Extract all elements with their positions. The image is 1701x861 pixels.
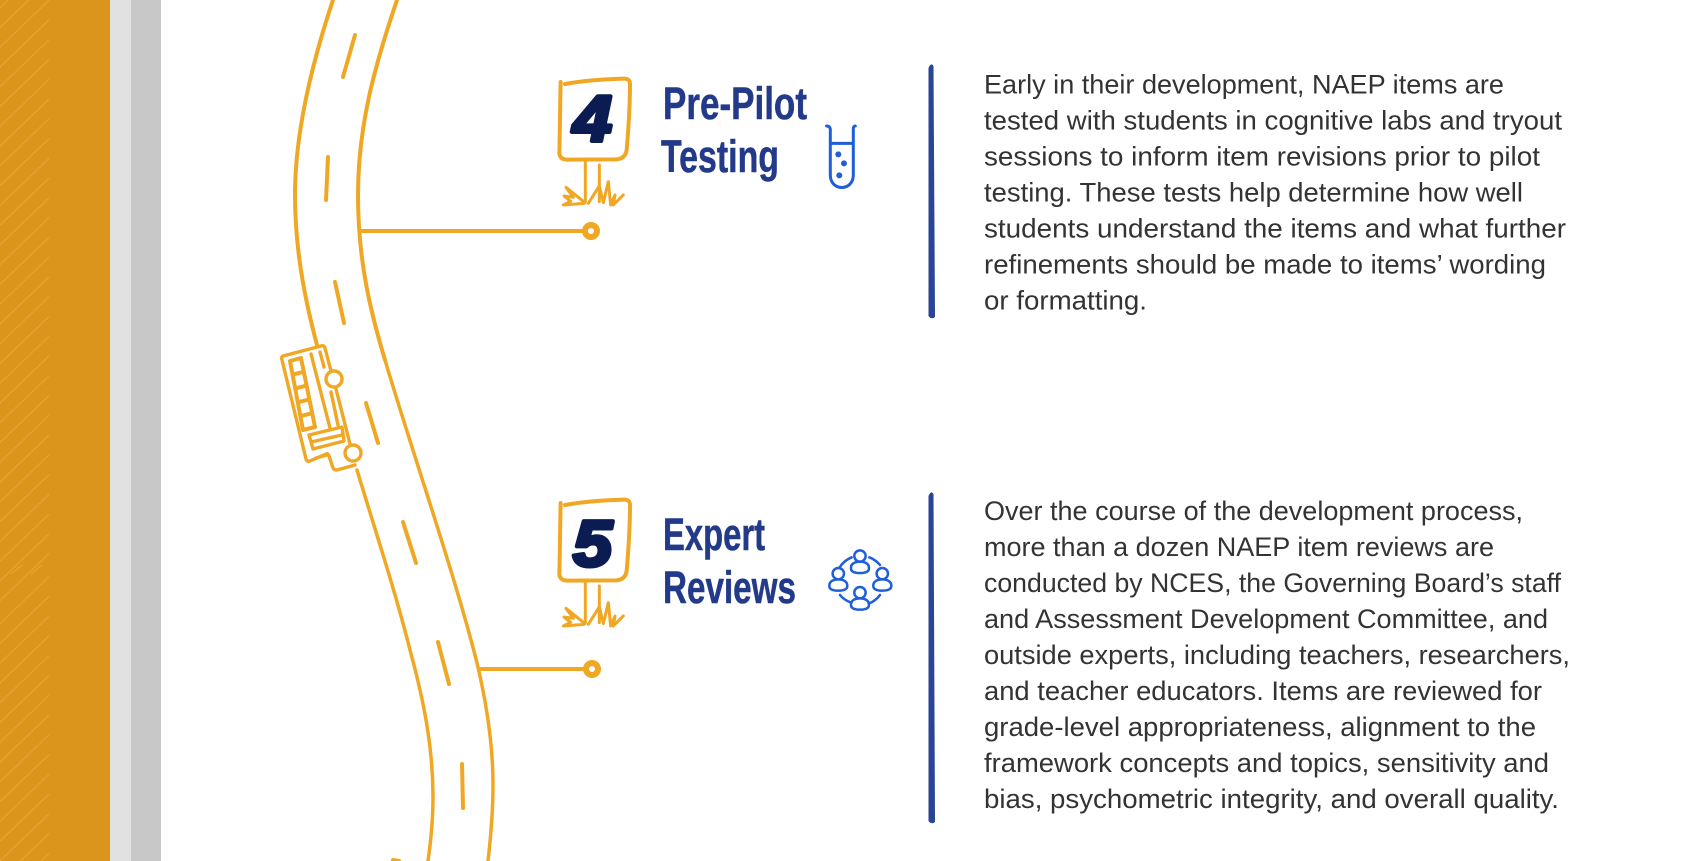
road (295, 0, 493, 861)
panel: left orange band with hatching (0, 0, 110, 861)
icon: sign post number 5: 5 (573, 507, 613, 580)
text block: step 5 description: bias, psychometric integrity, and overall quality. (984, 784, 1559, 814)
text block: step 4 description: Early in their development, NAEP items are (984, 69, 1504, 99)
icon: test tube (827, 126, 855, 187)
text block: step 4 description (984, 69, 1566, 315)
icon: school bus (282, 346, 361, 470)
heading: Pre-Pilot Testing (661, 78, 807, 182)
text block: step 5 description: outside experts, including teachers, researchers, (984, 640, 1570, 670)
divider bar: step 4 (928, 64, 935, 318)
connector: road to step 5 (478, 663, 598, 675)
text block: step 5 description: and teacher educators. Items are reviewed for (984, 676, 1542, 706)
text block: step 5 description: grade-level appropriateness, alignment to the (984, 712, 1536, 742)
text block: step 5 description: conducted by NCES, the Governing Board’s staff (984, 568, 1562, 598)
text block: step 4 description: students understand the items and what further (984, 213, 1566, 243)
heading: Expert Reviews: Reviews (663, 562, 796, 613)
panel: gray stripe (131, 0, 161, 861)
text block: step 5 description: Over the course of the development process, (984, 496, 1523, 526)
text block: step 5 description: framework concepts and topics, sensitivity and (984, 748, 1549, 778)
text block: step 4 description: sessions to inform item revisions prior to pilot (984, 141, 1541, 171)
text block: step 4 description: testing. These tests help determine how well (984, 177, 1523, 207)
heading: Expert Reviews: Expert (663, 509, 765, 560)
heading: Pre-Pilot Testing: Testing (661, 131, 779, 182)
connector: road to step 4 (361, 225, 597, 237)
icon: sign post number 4: 4 (571, 82, 612, 155)
panel: light gray stripe (110, 0, 131, 861)
heading: Expert Reviews (663, 509, 796, 613)
icon: circle of people (829, 550, 891, 610)
heading: Pre-Pilot Testing: Pre-Pilot (663, 78, 807, 129)
text block: step 5 description (984, 496, 1570, 814)
text block: step 4 description: refinements should be made to items’ wording (984, 249, 1546, 279)
icon: sign post number 5 (559, 500, 630, 626)
text block: step 5 description: and Assessment Development Committee, and (984, 604, 1548, 634)
text block: step 4 description: or formatting. (984, 285, 1147, 315)
text block: step 5 description: more than a dozen NAEP item reviews are (984, 532, 1494, 562)
icon: sign post number 4 (559, 79, 630, 205)
divider bar: step 5 (928, 492, 935, 823)
text block: step 4 description: tested with students in cognitive labs and tryout (984, 105, 1563, 135)
